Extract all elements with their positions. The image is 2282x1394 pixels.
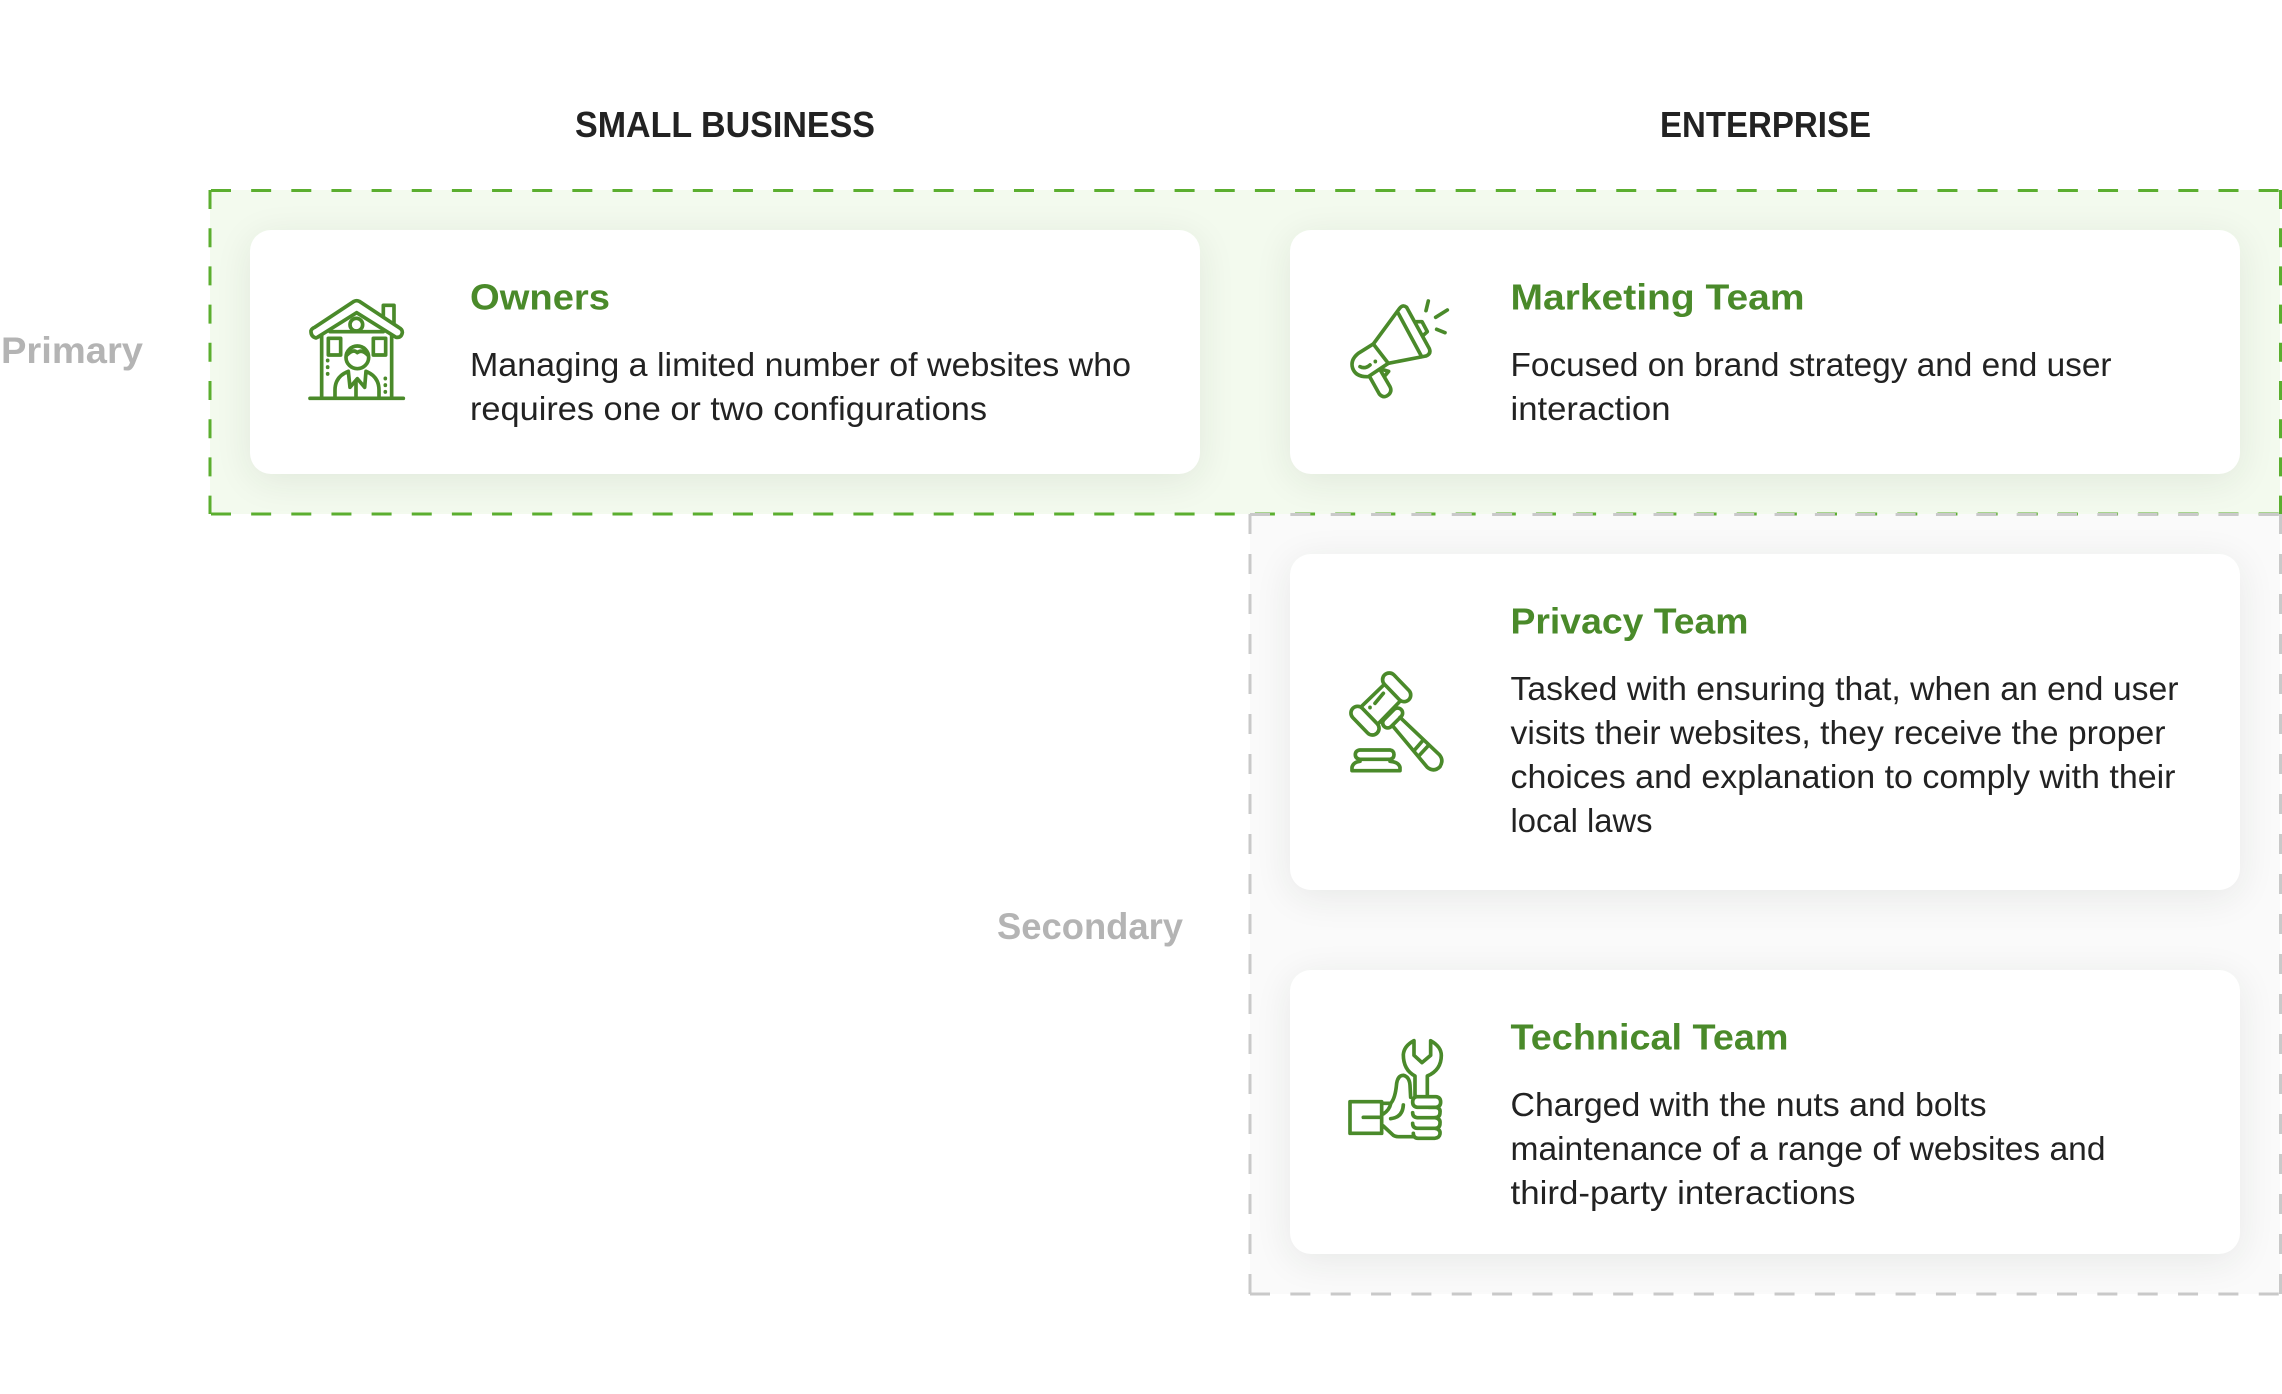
description: interaction bbox=[1510, 391, 1670, 428]
description bbox=[470, 347, 1131, 428]
icon: thumbs up with wrench bbox=[1350, 1041, 1441, 1138]
description: Charged with the nuts and bolts bbox=[1510, 1087, 1986, 1124]
column heading: enterprise: ENTERPRISE bbox=[1660, 104, 1871, 145]
title: Privacy Team bbox=[1510, 600, 1748, 642]
description: Managing a limited number of websites who bbox=[470, 347, 1131, 384]
card: technical team bbox=[1290, 970, 2240, 1254]
description: Focused on brand strategy and end user bbox=[1510, 347, 2112, 384]
title: Technical Team bbox=[1510, 1016, 1788, 1058]
description: choices and explanation to comply with their bbox=[1510, 759, 2176, 796]
row label: primary: Primary bbox=[1, 330, 143, 371]
description: third-party interactions bbox=[1510, 1175, 1856, 1212]
description bbox=[1510, 1087, 2106, 1212]
description: maintenance of a range of websites and bbox=[1510, 1131, 2106, 1168]
description bbox=[1510, 671, 2178, 840]
description bbox=[1510, 347, 2112, 428]
description: local laws bbox=[1510, 803, 1652, 840]
icon: megaphone bbox=[1352, 301, 1447, 397]
row label: secondary: Secondary bbox=[997, 906, 1183, 947]
description: Tasked with ensuring that, when an end user bbox=[1510, 671, 2178, 708]
card: privacy team bbox=[1290, 554, 2240, 890]
description: visits their websites, they receive the proper bbox=[1510, 715, 2166, 752]
panel: secondary band background bbox=[1250, 514, 2280, 1294]
icon: gavel bbox=[1348, 670, 1442, 771]
title: Owners bbox=[470, 276, 610, 318]
card: marketing team bbox=[1290, 230, 2240, 474]
description: requires one or two configurations bbox=[470, 391, 987, 428]
card: owners bbox=[250, 230, 1200, 474]
panel: primary band background bbox=[210, 190, 2280, 514]
icon: house with owner bbox=[310, 301, 403, 398]
title: Marketing Team bbox=[1510, 276, 1804, 318]
column heading: small business: SMALL BUSINESS bbox=[575, 104, 875, 145]
